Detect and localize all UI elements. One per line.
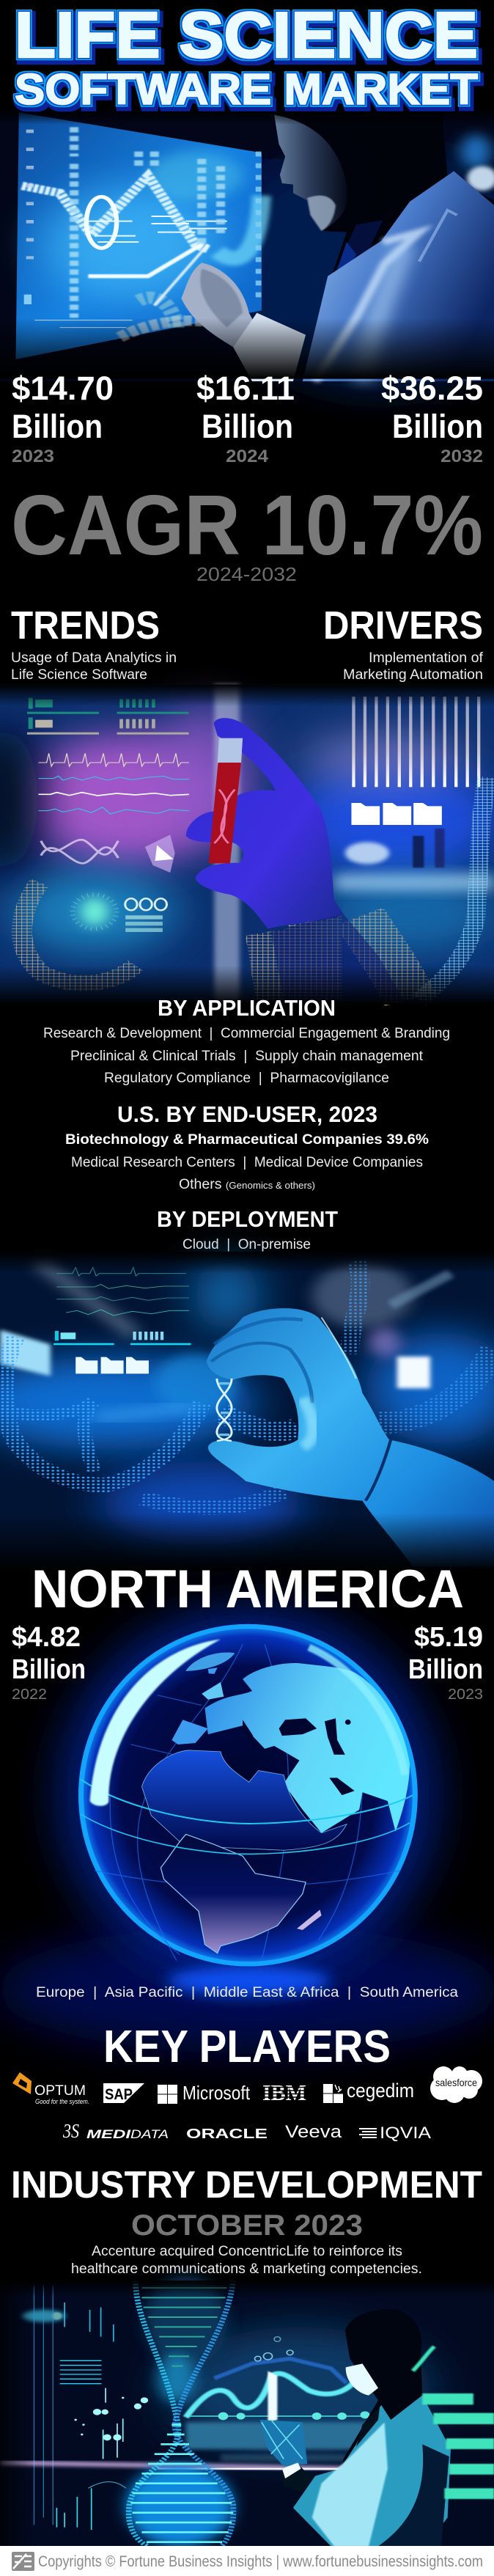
dna helix	[126, 2275, 233, 2547]
logo: medidata: MEDI	[86, 2127, 132, 2141]
footer logo	[12, 2552, 34, 2571]
market value 2023: Billion	[12, 408, 103, 445]
region value 2022	[12, 1622, 86, 1703]
market value 2023	[12, 370, 114, 466]
logo: oracle: ORACLE	[186, 2127, 268, 2141]
wave line	[186, 2374, 353, 2418]
logo: medidata	[62, 2120, 169, 2142]
market value 2024: 2024	[226, 447, 269, 466]
region value 2023: $5.19	[414, 1622, 483, 1653]
logo: ibm: IBM	[262, 2080, 306, 2105]
folder icons	[75, 1357, 149, 1373]
dotted dna mesh	[0, 1261, 494, 1508]
market value 2024: $16.11	[196, 370, 295, 407]
logo: microsoft	[158, 2082, 251, 2104]
light beam	[0, 2462, 350, 2469]
title line 1: LIFE SCIENCE	[15, 0, 478, 71]
gloved hand	[186, 718, 344, 929]
logo: sap	[103, 2083, 144, 2103]
madagascar	[297, 1909, 322, 1930]
development description: Accenture acquired ConcentricLife to reinforce its	[92, 2244, 402, 2259]
folder icons	[351, 803, 442, 825]
title	[15, 0, 478, 114]
dna strand	[217, 1379, 232, 1441]
application list: Regulatory Compliance | Pharmacovigilance	[104, 1071, 389, 1086]
dna hologram	[41, 840, 118, 863]
title line 2: SOFTWARE MARKET	[15, 65, 478, 114]
logo: cegedim: cegedim	[347, 2080, 414, 2102]
glove folds	[211, 1318, 391, 1501]
ui monitor traces	[56, 1267, 189, 1315]
scientist hand and stylus	[155, 244, 306, 381]
data nodes	[74, 2397, 148, 2440]
market value 2032	[381, 370, 483, 466]
region value 2022: Billion	[12, 1654, 86, 1685]
highlight crescent	[90, 1639, 221, 1806]
region value 2022: 2022	[12, 1687, 47, 1703]
application list: Research & Development | Commercial Engagement & Branding	[43, 1026, 450, 1041]
test tube with dna	[209, 738, 243, 863]
scientist figure	[282, 2309, 451, 2546]
application heading: BY APPLICATION	[158, 995, 336, 1021]
development description: healthcare communications & marketing competencies.	[71, 2261, 422, 2277]
eurasia landmass	[205, 1663, 410, 1833]
region value 2023: Billion	[408, 1654, 483, 1685]
deployment list: Cloud | On-premise	[183, 1237, 311, 1252]
development description	[71, 2244, 422, 2277]
iberia britain greenland islands	[172, 1652, 235, 1744]
inland seas	[243, 1718, 355, 1795]
logo: iqvia	[359, 2124, 431, 2142]
end user heading: U.S. BY END-USER, 2023	[117, 1101, 377, 1127]
market value 2032: 2032	[440, 447, 483, 466]
market value 2024	[196, 370, 295, 466]
latitude bands	[81, 1779, 413, 1854]
panel: hero image scientist with dna helix	[0, 2275, 494, 2547]
key players heading: KEY PLAYERS	[103, 2022, 391, 2072]
glow orb and gauges	[73, 895, 166, 932]
development date: OCTOBER 2023	[131, 2209, 363, 2242]
scientist silhouette	[274, 108, 494, 381]
hologram hand	[254, 2337, 307, 2466]
globe sphere	[78, 1624, 418, 1966]
logo: salesforce: salesforce	[435, 2077, 477, 2088]
logo: optum: OPTUM	[34, 2083, 86, 2099]
trends block: Life Science Software	[11, 667, 147, 683]
market value 2024: Billion	[202, 408, 293, 445]
shard icon	[145, 834, 175, 873]
left chart lines	[34, 2286, 126, 2530]
teal side bars	[422, 2393, 494, 2499]
drivers block	[323, 603, 484, 683]
logo: medidata: 3S	[62, 2120, 79, 2142]
logo: salesforce	[430, 2066, 482, 2103]
end user list	[65, 1132, 429, 1192]
region value 2023: 2023	[448, 1687, 483, 1703]
region heading: NORTH AMERICA	[32, 1560, 464, 1619]
logo: veeva: Veeva	[285, 2122, 342, 2142]
end user list: Medical Research Centers | Medical Device Companies	[71, 1155, 423, 1170]
logo: sap: SAP	[105, 2086, 133, 2103]
industry development heading: INDUSTRY DEVELOPMENT	[11, 2164, 482, 2206]
panel: hero image scientist at screen	[0, 108, 494, 391]
panel: north america globe	[0, 1607, 494, 2053]
market value 2023: 2023	[12, 447, 54, 466]
africa landmass	[142, 1750, 347, 1850]
market value 2032: $36.25	[381, 370, 483, 407]
ui stat bars top left	[27, 698, 189, 735]
drivers block: Marketing Automation	[343, 667, 483, 683]
trends block	[11, 603, 177, 683]
gloved hand	[207, 1308, 494, 1567]
panel: hero image gloved hand with test tube	[0, 684, 494, 1005]
region value 2022: $4.82	[12, 1622, 81, 1653]
logo: optum	[12, 2072, 89, 2105]
application list: Preclinical & Clinical Trials | Supply chain management	[70, 1049, 424, 1064]
logo: medidata: DATA	[130, 2127, 169, 2141]
drivers block: DRIVERS	[323, 603, 483, 647]
panel: hero image blue glove holding dna	[0, 1252, 494, 1571]
trends block: Usage of Data Analytics in	[11, 650, 177, 666]
grid lines	[95, 1645, 400, 1961]
wrist mesh	[271, 914, 403, 999]
application list	[43, 1026, 450, 1086]
ui stat bars	[54, 1331, 191, 1345]
mesh strands	[22, 777, 487, 999]
logo: optum: Good for the system.	[35, 2098, 89, 2105]
ecg traces	[38, 753, 189, 814]
drivers block: Implementation of	[369, 650, 484, 666]
logo: microsoft: Microsoft	[183, 2082, 251, 2104]
other regions list: Europe | Asia Pacific | Middle East & Africa | South America	[36, 1985, 458, 2000]
region value 2023	[408, 1622, 483, 1703]
end user list: Others (Genomics & others)	[179, 1177, 315, 1192]
south america landmass	[161, 1835, 306, 1953]
trends block: TRENDS	[11, 603, 160, 647]
deployment heading: BY DEPLOYMENT	[157, 1206, 338, 1232]
market value 2023: $14.70	[12, 370, 114, 407]
logo: cegedim	[323, 2080, 414, 2103]
end user list: Biotechnology & Pharmaceutical Companies 39.6%	[65, 1132, 429, 1148]
CAGR period: 2024-2032	[196, 563, 297, 585]
chart bars top right	[352, 697, 480, 787]
market value 2032: Billion	[392, 408, 483, 445]
logo: iqvia: IQVIA	[380, 2124, 431, 2142]
data screen	[16, 112, 262, 359]
footer bar	[0, 2546, 494, 2576]
